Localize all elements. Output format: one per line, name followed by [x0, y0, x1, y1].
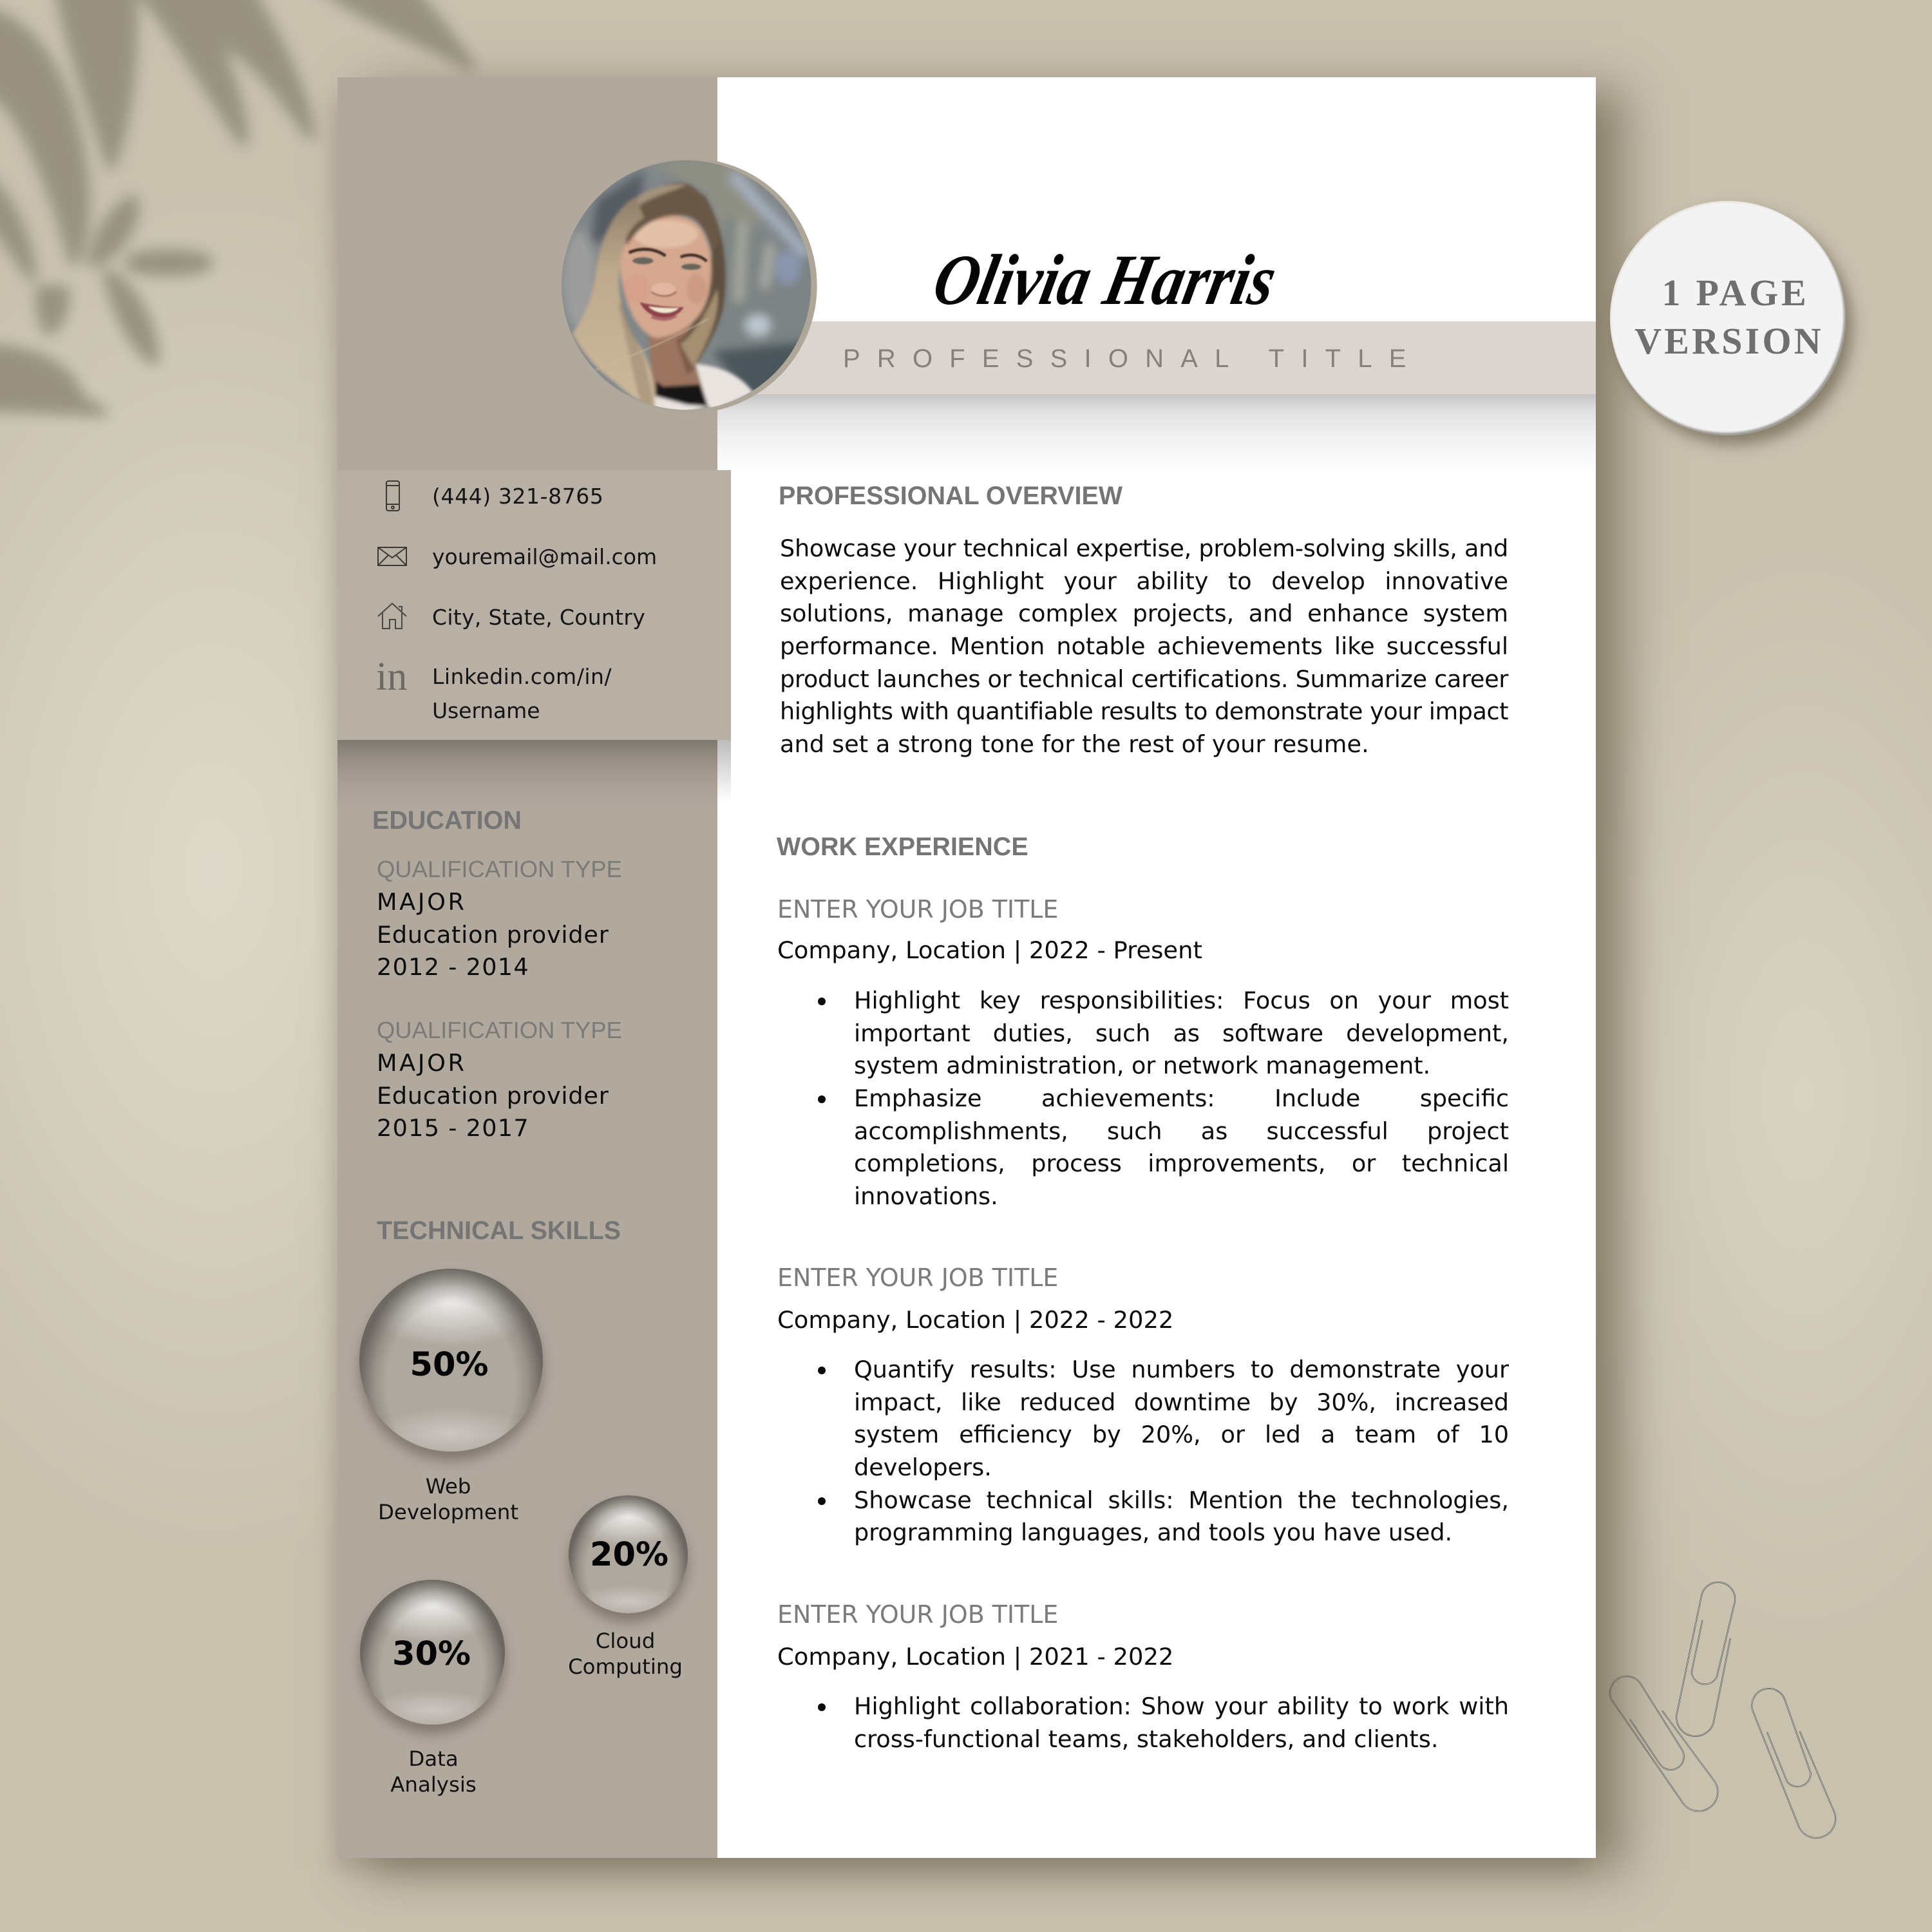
- paper clips: [1609, 1582, 1837, 1839]
- icon: linkedin: in: [376, 655, 407, 699]
- overview paragraph: performance. Mention notable achievements like successful: [780, 632, 1508, 660]
- qualification 1: 2012 - 2014: [377, 953, 529, 981]
- bullets: important duties, such as software development,: [854, 1019, 1509, 1047]
- label data analysis: Analysis: [390, 1772, 477, 1797]
- bullets: system efficiency by 20%, or led a team of 10: [854, 1421, 1509, 1448]
- education heading: EDUCATION: [372, 806, 522, 835]
- badge text line 2: VERSION: [1634, 320, 1824, 362]
- bullets: impact, like reduced downtime by 30%, increased: [854, 1388, 1509, 1416]
- bubble 20%: [569, 1495, 688, 1613]
- qualification 2: 2015 - 2017: [377, 1114, 529, 1142]
- icon: home: [377, 603, 407, 629]
- bullets: system administration, or network management.: [854, 1052, 1430, 1079]
- overview paragraph: [780, 535, 1508, 758]
- linkedin url: Linkedin.com/in/: [432, 664, 612, 689]
- badge text line 1: 1 PAGE: [1662, 272, 1810, 314]
- bullets: Highlight collaboration: Show your ability to work with: [854, 1692, 1509, 1720]
- professional title: PROFESSIONAL TITLE: [843, 345, 1423, 373]
- overview paragraph: Showcase your technical expertise, problem-solving skills, and: [780, 535, 1508, 562]
- resume page: [337, 77, 1596, 1858]
- linkedin username: Username: [432, 698, 540, 723]
- overview paragraph: product launches or technical certifications. Summarize career: [780, 665, 1508, 693]
- label web development: [378, 1474, 518, 1524]
- icon: envelope: [377, 547, 407, 566]
- work experience heading: WORK EXPERIENCE: [777, 833, 1028, 861]
- label cloud computing: Computing: [568, 1654, 683, 1679]
- job 2: [777, 1264, 1510, 1546]
- label data analysis: Data: [408, 1747, 459, 1771]
- contact panel shadow on white: [717, 740, 731, 802]
- icon: phone: [386, 480, 400, 511]
- overview heading: PROFESSIONAL OVERVIEW: [779, 482, 1122, 510]
- education section: [372, 806, 622, 1142]
- leaf shadows: [0, 0, 478, 424]
- skill bubble: cloud computing: [563, 1495, 693, 1679]
- bullets: Highlight key responsibilities: Focus on your most: [854, 987, 1509, 1014]
- location: City, State, Country: [432, 605, 645, 630]
- bubble 50%: [359, 1269, 543, 1452]
- phone number: (444) 321-8765: [432, 484, 604, 509]
- overview paragraph: highlights with quantifiable results to demonstrate your impact: [780, 697, 1508, 725]
- job title: ENTER YOUR JOB TITLE: [777, 1264, 1058, 1292]
- overview paragraph: and set a strong tone for the rest of your resume.: [780, 730, 1369, 758]
- qualification 1: Education provider: [377, 921, 609, 949]
- qualification 1: [377, 856, 622, 981]
- skill bubble: data analysis: [354, 1580, 511, 1797]
- bubble 50%: 50%: [410, 1346, 489, 1384]
- bullets: innovations.: [854, 1182, 998, 1210]
- bullets: Quantify results: Use numbers to demonstrate your: [854, 1356, 1509, 1383]
- portrait photo: [562, 160, 817, 410]
- name: Olivia Harris: [927, 240, 1283, 320]
- company line: Company, Location | 2022 - Present: [777, 936, 1202, 964]
- label cloud computing: [568, 1629, 683, 1679]
- bubble 30%: [360, 1580, 505, 1725]
- job 3: [777, 1600, 1509, 1753]
- label web development: Web: [426, 1474, 471, 1499]
- job 1: [777, 895, 1509, 1210]
- label web development: Development: [378, 1500, 518, 1524]
- sidebar panel: [337, 77, 717, 1858]
- bullets: developers.: [854, 1454, 992, 1481]
- bullets: completions, process improvements, or technical: [854, 1150, 1509, 1177]
- bullets: Emphasize achievements: Include specific: [854, 1084, 1509, 1112]
- contact panel shadow: [337, 740, 717, 808]
- bullets: programming languages, and tools you have used.: [854, 1519, 1452, 1546]
- overview paragraph: solutions, manage complex projects, and enhance system: [780, 600, 1508, 627]
- bullets: Showcase technical skills: Mention the technologies,: [854, 1486, 1509, 1514]
- bubble 30%: 30%: [392, 1635, 471, 1673]
- label data analysis: [390, 1747, 477, 1797]
- badge: 1 page version: [1610, 201, 1846, 435]
- overview paragraph: experience. Highlight your ability to develop innovative: [780, 567, 1508, 595]
- qualification 2: MAJOR: [377, 1049, 467, 1077]
- qualification 2: QUALIFICATION TYPE: [377, 1017, 622, 1043]
- band shadow: [717, 394, 1596, 470]
- skill bubble: web development: [354, 1269, 549, 1524]
- contact panel: [337, 470, 731, 740]
- bullets: [818, 987, 1509, 1210]
- bubble 20%: 20%: [590, 1536, 668, 1574]
- title band: [717, 321, 1596, 394]
- company line: Company, Location | 2021 - 2022: [777, 1643, 1173, 1671]
- bullets: cross-functional teams, stakeholders, and clients.: [854, 1725, 1438, 1753]
- bullets: [818, 1356, 1510, 1546]
- bullets: [818, 1692, 1509, 1753]
- job title: ENTER YOUR JOB TITLE: [777, 895, 1058, 923]
- company line: Company, Location | 2022 - 2022: [777, 1306, 1173, 1334]
- email: youremail@mail.com: [432, 544, 657, 569]
- technical skills heading: TECHNICAL SKILLS: [377, 1217, 621, 1245]
- label cloud computing: Cloud: [596, 1629, 655, 1653]
- bullets: accomplishments, such as successful project: [854, 1117, 1509, 1145]
- qualification 1: MAJOR: [377, 888, 467, 916]
- job title: ENTER YOUR JOB TITLE: [777, 1600, 1058, 1629]
- qualification 1: QUALIFICATION TYPE: [377, 856, 622, 882]
- qualification 2: [377, 1017, 622, 1142]
- qualification 2: Education provider: [377, 1082, 609, 1110]
